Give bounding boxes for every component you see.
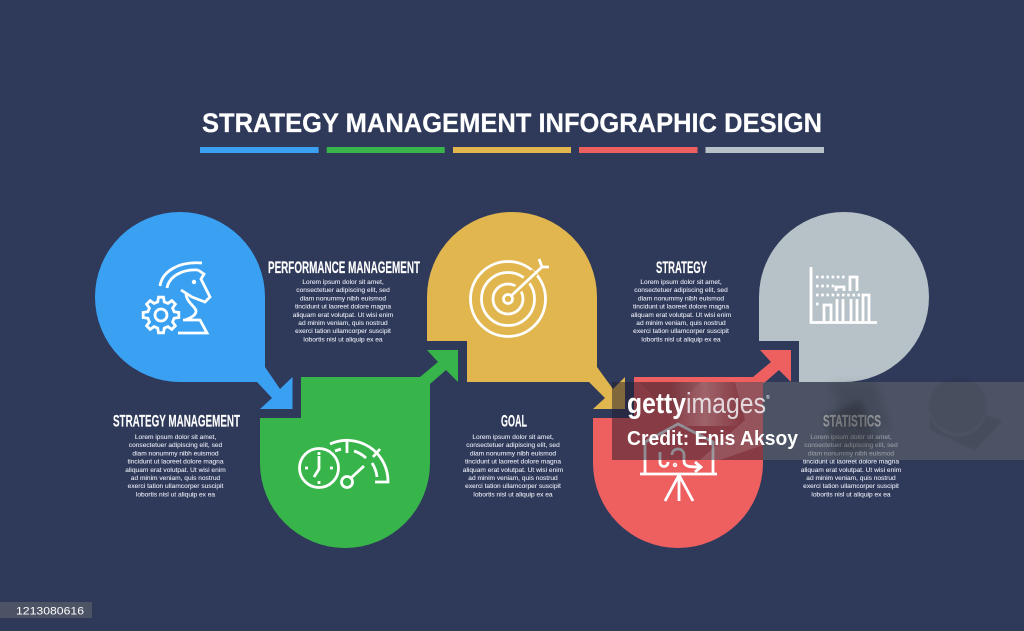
panel: strategy management (blue)	[95, 212, 292, 409]
text block: performance management: Lorem ipsum dolor sit amet,	[302, 279, 384, 286]
text block: performance management: lobortis nisl ut aliquip ex ea	[303, 336, 383, 343]
text block: statistics: exerci tation ullamcorper suscipit	[803, 483, 899, 490]
text block: statistics: diam nonummy nibh euismod	[808, 450, 894, 457]
text block: strategy: tincidunt ut laoreet dolore magna	[633, 304, 729, 311]
text block: strategy management: lobortis nisl ut aliquip ex ea	[136, 491, 215, 498]
text block: strategy: exerci tation ullamcorper suscipit	[633, 328, 729, 335]
text block: goal: diam nonummy nibh euismod	[470, 450, 556, 457]
text block: strategy: aliquam erat volutpat. Ut wisi enim	[631, 312, 732, 319]
title: STRATEGY MANAGEMENT INFOGRAPHIC DESIGN	[202, 108, 822, 138]
colour legend bars	[200, 147, 824, 153]
image id tag	[0, 602, 92, 618]
text block: strategy: diam nonummy nibh euismod	[638, 295, 724, 302]
text block: goal: ad minim veniam, quis nostrud	[468, 475, 558, 482]
text block: goal: lobortis nisl ut aliquip ex ea	[473, 491, 553, 498]
icon: target with arrow	[470, 259, 549, 336]
text block: statistics: Lorem ipsum dolor sit amet,	[810, 434, 892, 441]
icon: presentation board	[640, 424, 717, 501]
text block: strategy: lobortis nisl ut aliquip ex ea	[641, 336, 721, 343]
text block: goal	[463, 412, 564, 498]
watermark: credit line: Credit: Enis Aksoy	[627, 427, 799, 450]
text block: strategy: ad minim veniam, quis nostrud	[636, 320, 726, 327]
watermark: getty images logo: getty	[627, 388, 686, 420]
text block: statistics: STATISTICS	[823, 412, 881, 430]
text block: performance management: aliquam erat volutpat. Ut wisi enim	[293, 312, 394, 319]
text block: statistics: lobortis nisl ut aliquip ex ea	[811, 491, 891, 498]
text block: strategy: consectetuer adipiscing elit, sed	[634, 287, 728, 294]
text block: strategy: STRATEGY	[656, 259, 707, 277]
panel: statistics (grey)	[759, 212, 929, 382]
text block: goal: Lorem ipsum dolor sit amet,	[472, 434, 554, 441]
text block: performance management: diam nonummy nibh euismod	[300, 295, 386, 302]
text block: strategy management: exerci tation ullamcorper suscipit	[128, 483, 223, 490]
text block: strategy management: STRATEGY MANAGEMENT	[113, 412, 240, 430]
text block: statistics: consectetuer adipiscing elit, sed	[804, 442, 898, 449]
text block: strategy management	[113, 412, 240, 498]
text block: goal: aliquam erat volutpat. Ut wisi enim	[463, 467, 564, 474]
text block: strategy: Lorem ipsum dolor sit amet,	[640, 279, 722, 286]
text block: goal: tincidunt ut laoreet dolore magna	[465, 459, 561, 466]
text block: performance management: PERFORMANCE MANAGEMENT	[268, 259, 420, 277]
watermark: getty images logo: images	[686, 388, 766, 420]
text block: performance management: consectetuer adipiscing elit, sed	[296, 287, 390, 294]
text block: goal: exerci tation ullamcorper suscipit	[465, 483, 561, 490]
panel: goal (gold)	[427, 212, 625, 409]
text block: strategy management: diam nonummy nibh euismod	[132, 450, 219, 457]
panel: performance management (green)	[260, 350, 458, 548]
text block: statistics: ad minim veniam, quis nostrud	[806, 475, 896, 482]
text block: goal: GOAL	[501, 412, 527, 430]
text block: statistics: tincidunt ut laoreet dolore magna	[803, 459, 899, 466]
text block: strategy	[631, 259, 732, 343]
icon: bar chart	[811, 267, 877, 322]
icon: knight and gear	[143, 263, 210, 333]
panel: strategy (red)	[593, 350, 791, 548]
text block: strategy management: tincidunt ut laoreet dolore magna	[127, 459, 224, 466]
text block: strategy management: consectetuer adipiscing elit, sed	[129, 442, 223, 449]
text block: performance management: ad minim veniam, quis nostrud	[298, 320, 388, 327]
text block: strategy management: Lorem ipsum dolor sit amet,	[135, 434, 216, 441]
text block: performance management: exerci tation ullamcorper suscipit	[295, 328, 391, 335]
text block: statistics: aliquam erat volutpat. Ut wisi enim	[801, 467, 902, 474]
text block: performance management	[268, 259, 420, 343]
text block: statistics	[801, 412, 902, 498]
image id tag: 1213080616	[16, 606, 84, 618]
text block: strategy management: ad minim veniam, quis nostrud	[131, 475, 221, 482]
icon: clock and gauge	[300, 440, 388, 488]
watermark band	[612, 377, 1024, 460]
text block: goal: consectetuer adipiscing elit, sed	[466, 442, 560, 449]
watermark: getty images logo	[627, 388, 770, 420]
watermark: getty images logo: ®	[766, 394, 770, 401]
text block: performance management: tincidunt ut laoreet dolore magna	[295, 304, 391, 311]
text block: strategy management: aliquam erat volutpat. Ut wisi enim	[125, 467, 226, 474]
